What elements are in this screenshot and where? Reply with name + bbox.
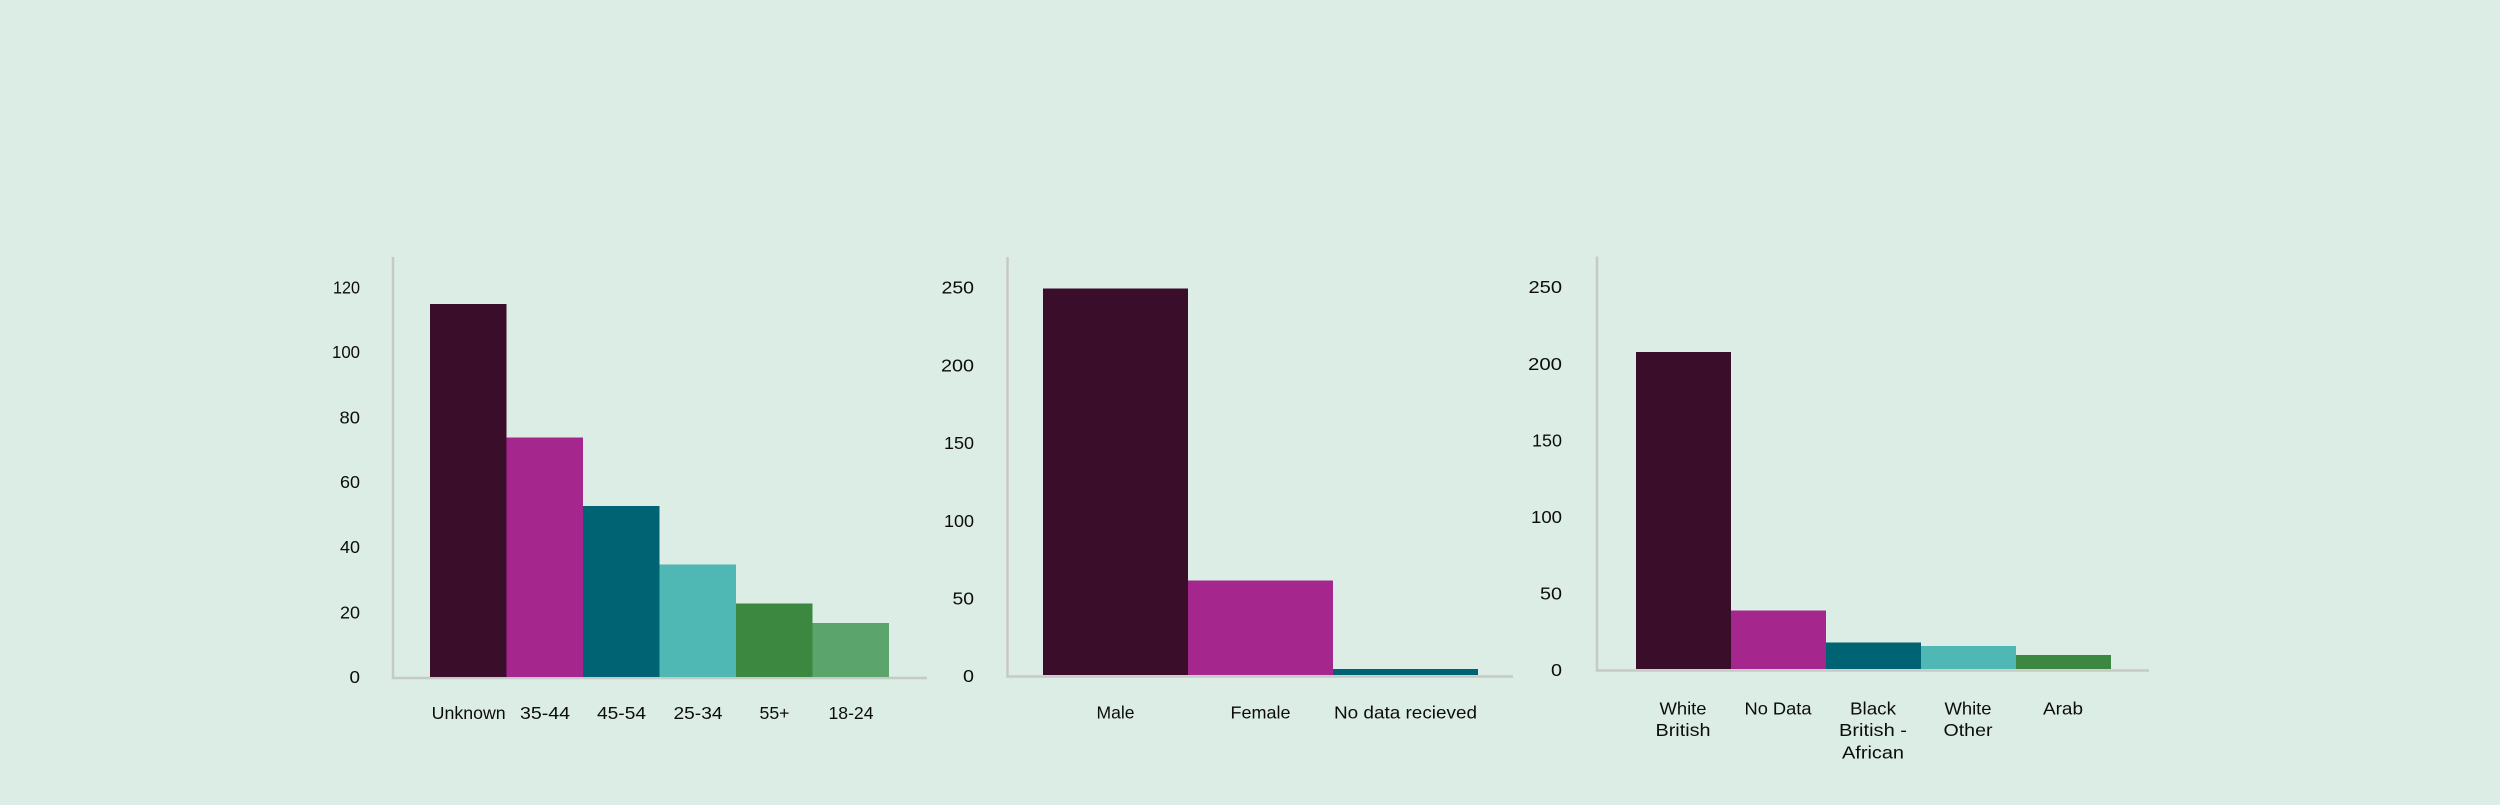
gender chart category labels: No data recieved	[1334, 702, 1477, 722]
age chart y-axis labels: 0	[350, 667, 360, 687]
ethnicity chart category labels: African	[1842, 742, 1904, 762]
gender chart bars	[1043, 288, 1478, 675]
ethnicity chart category labels: British	[1656, 720, 1710, 740]
age chart category labels: Unknown	[432, 703, 506, 723]
gender chart category labels: Female	[1230, 702, 1290, 722]
panel: ethnicity bar chart	[1528, 256, 2149, 762]
age chart y-axis labels: 20	[340, 602, 360, 622]
ethnicity chart category labels: British -	[1839, 720, 1907, 740]
ethnicity chart category labels: Other	[1944, 720, 1993, 740]
age chart y-axis labels: 80	[340, 408, 360, 428]
age chart category labels: 55+	[760, 703, 790, 723]
ethnicity chart y-axis labels: 0	[1551, 660, 1562, 680]
age chart y-axis labels: 100	[332, 342, 360, 362]
age chart axes	[393, 257, 927, 678]
gender chart y-axis labels: 250	[942, 278, 974, 298]
age chart category labels: 18-24	[828, 703, 874, 723]
ethnicity chart y-axis labels: 200	[1528, 354, 1562, 374]
age chart y-axis labels: 40	[340, 537, 360, 557]
age chart category labels: 35-44	[520, 703, 570, 723]
ethnicity chart category labels: No Data	[1744, 698, 1812, 718]
age chart category labels: 25-34	[674, 703, 723, 723]
ethnicity chart y-axis labels: 50	[1540, 584, 1562, 604]
panel: gender bar chart	[941, 257, 1513, 722]
panel: age bar chart	[332, 257, 927, 723]
ethnicity chart y-axis labels: 250	[1528, 277, 1562, 297]
ethnicity chart category labels	[1656, 698, 2083, 762]
ethnicity chart category labels: White	[1944, 698, 1992, 718]
gender chart y-axis labels: 50	[952, 588, 974, 608]
ethnicity chart category labels: Arab	[2043, 698, 2083, 718]
ethnicity chart y-axis labels: 100	[1531, 507, 1562, 527]
ethnicity chart bars	[1636, 352, 2111, 669]
gender chart y-axis labels: 200	[941, 356, 974, 376]
ethnicity chart category labels: Black	[1850, 698, 1896, 718]
ethnicity chart y-axis labels: 150	[1532, 430, 1562, 450]
age chart y-axis labels: 60	[340, 472, 360, 492]
gender chart y-axis labels	[941, 278, 974, 686]
gender chart axes	[1008, 257, 1513, 676]
gender chart y-axis labels: 0	[963, 666, 974, 686]
ethnicity chart category labels: White	[1660, 698, 1706, 718]
age chart y-axis labels	[332, 278, 360, 687]
age chart y-axis labels: 120	[333, 278, 360, 298]
gender chart y-axis labels: 150	[944, 433, 974, 453]
age chart bars	[430, 304, 889, 677]
ethnicity chart axes	[1597, 256, 2149, 670]
age chart category labels: 45-54	[597, 703, 646, 723]
age chart category labels	[432, 703, 874, 723]
gender chart category labels	[1096, 702, 1477, 722]
gender chart y-axis labels: 100	[944, 511, 974, 531]
gender chart category labels: Male	[1096, 702, 1134, 722]
ethnicity chart y-axis labels	[1528, 277, 1562, 680]
